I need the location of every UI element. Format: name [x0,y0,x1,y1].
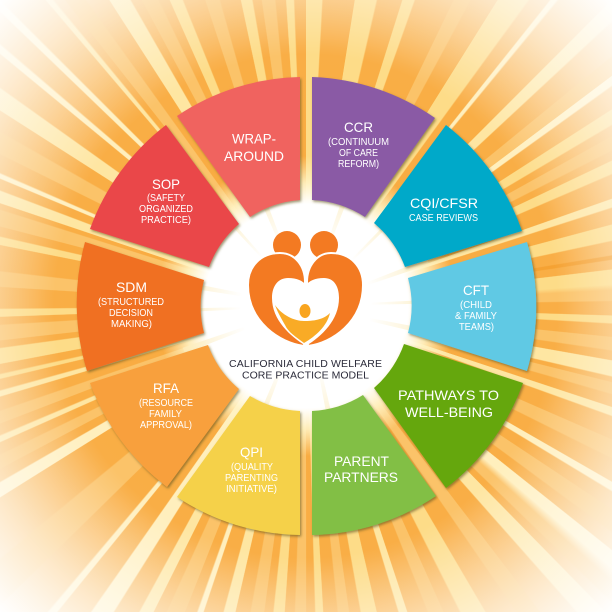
panel: CQI/CFSR: CASE REVIEWS [409,213,478,224]
panel: SOP: SOP [152,176,180,192]
panel: CFT [408,242,536,371]
panel: RFA: (RESOURCE [139,398,193,409]
panel: CFT: TEAMS) [459,322,494,333]
panel: CFT: CFT [463,282,489,298]
panel: QPI: (QUALITY [231,462,273,473]
panel: CQI/CFSR [374,125,522,267]
panel: SDM: DECISION [109,308,153,319]
panel: QPI: PARENTING [225,473,278,484]
icon: family heart logo [248,231,363,346]
panel: CCR: OF CARE [339,148,378,159]
panel: CQI/CFSR: CQI/CFSR [410,195,478,211]
panel: SDM: SDM [116,279,147,295]
panel: PARENT PARTNERS: PARENT [334,453,389,469]
title: CORE PRACTICE MODEL [242,370,369,382]
panel: RFA [90,345,239,487]
panel: RFA: FAMILY [149,409,182,420]
panel: CCR: REFORM) [338,159,379,170]
panel: SDM: MAKING) [111,319,152,330]
panel: PARENT PARTNERS: PARTNERS [324,469,398,485]
panel: SDM: (STRUCTURED [98,297,164,308]
panel: WRAP-AROUND: AROUND [224,148,284,164]
title: CALIFORNIA CHILD WELFARE [229,358,382,370]
panel: PATHWAYS TO WELL-BEING: PATHWAYS TO [398,387,499,403]
panel: QPI: QPI [240,444,263,460]
panel: CCR: (CONTINUUM [328,137,389,148]
panel: RFA: APPROVAL) [140,420,192,431]
panel: SOP: ORGANIZED [139,204,193,215]
panel: PATHWAYS TO WELL-BEING: WELL-BEING [405,404,493,420]
center glow rays [176,183,436,434]
panel: SDM [77,242,204,371]
panel: PATHWAYS TO WELL-BEING [374,344,523,488]
panel: CFT: & FAMILY [455,311,497,322]
panel: QPI: INITIATIVE) [226,484,277,495]
panel: CFT: (CHILD [460,300,492,311]
panel: WRAP-AROUND [177,77,300,217]
panel: SOP: (SAFETY [147,193,185,204]
panel: QPI [177,396,300,535]
panel: RFA: RFA [153,380,180,396]
panel: CCR: CCR [344,119,373,135]
panel: CCR [312,77,435,217]
panel: WRAP-AROUND: WRAP- [232,130,276,146]
panel: SOP: PRACTICE) [141,215,191,226]
panel: SOP [90,125,239,267]
title [229,358,382,382]
panel: PARENT PARTNERS [312,395,436,535]
